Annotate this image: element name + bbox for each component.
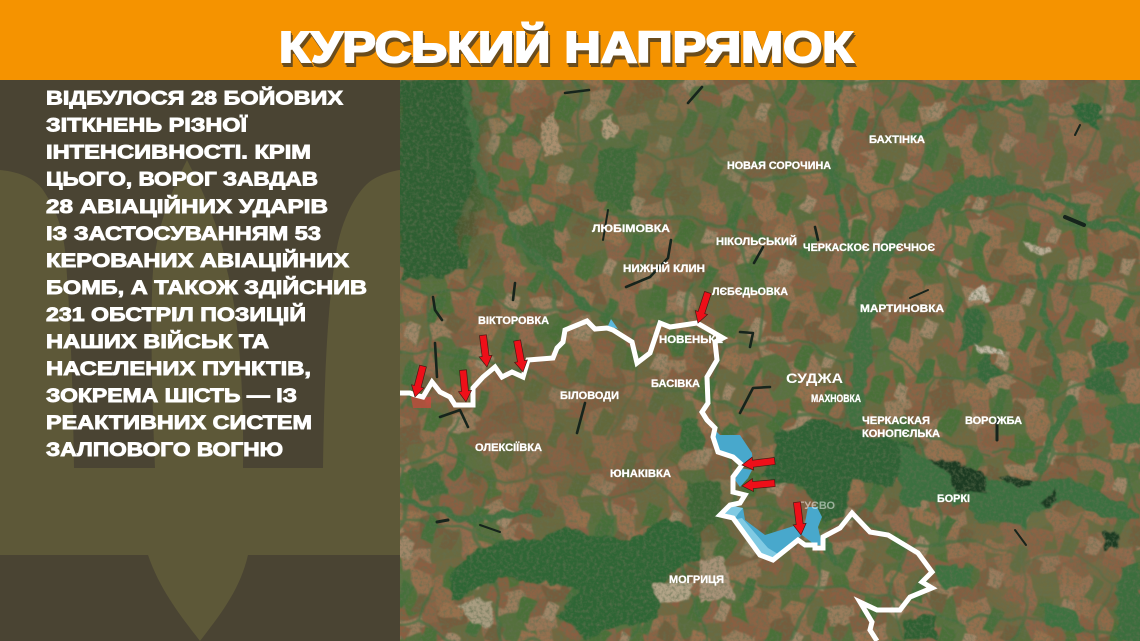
western greens xyxy=(400,80,478,280)
satellite fields background xyxy=(380,60,1140,641)
text block: summary: ЗІТКНЕНЬ РІЗНОЇ xyxy=(46,114,248,136)
arrow 2 xyxy=(457,370,472,403)
text block: summary: КЕРОВАНИХ АВІАЦІЙНИХ xyxy=(46,248,349,272)
pale bare fields xyxy=(1020,240,1055,255)
trident emblem watermark xyxy=(0,160,400,641)
settlement labels: ЛЄБЄДЬОВКА xyxy=(712,286,788,298)
title shadow: КУРСЬКИЙ НАПРЯМОК xyxy=(280,23,854,74)
settlement labels: МОГРИЦЯ xyxy=(669,574,724,586)
south-west forest xyxy=(450,517,700,637)
blue contested areas xyxy=(607,319,822,560)
settlement labels: ЧЕРКАСКАЯ xyxy=(862,415,930,427)
green patches east xyxy=(1107,405,1140,443)
occupied zone red marker xyxy=(411,397,431,408)
image grain xyxy=(400,80,1140,641)
settlement labels: МАРТИНОВКА xyxy=(860,303,944,315)
text block: summary: НАСЕЛЕНИХ ПУНКТІВ, xyxy=(46,358,311,380)
text block: summary: ЦЬОГО, ВОРОГ ЗАВДАВ xyxy=(46,169,318,191)
settlement labels: НОВЕНЬКЕ xyxy=(659,334,723,346)
text block: summary: ІНТЕНСИВНОСТІ. КРІМ xyxy=(46,142,311,164)
arrow 3 xyxy=(478,334,492,368)
settlement labels: ОЛЕКСІЇВКА xyxy=(475,441,542,454)
arrow 5 xyxy=(694,291,712,324)
forests and green corridors xyxy=(400,80,1140,641)
settlement labels: ВІКТОРОВКА xyxy=(478,315,549,327)
dark woodland patches xyxy=(927,460,987,493)
settlement labels: БОРКІ xyxy=(937,493,970,505)
settlement labels: КОНОПЄЛЬКА xyxy=(862,428,940,440)
settlement labels: НОВАЯ СОРОЧИНА xyxy=(727,160,831,172)
arrow 6 xyxy=(741,456,776,470)
title xyxy=(279,21,855,76)
settlement labels: НИЖНІЙ КЛИН xyxy=(623,262,705,275)
arrow 1 xyxy=(411,364,427,398)
settlement labels: ЧЕРКАСКОЄ ПОРЄЧНОЄ xyxy=(803,242,935,254)
faded label under arrow: ГУЄВО xyxy=(798,500,835,512)
arrow 7 xyxy=(742,478,776,492)
text block: summary: 28 АВІАЦІЙНИХ УДАРІВ xyxy=(46,194,328,218)
text block: summary: ЗОКРЕМА ШІСТЬ — ІЗ xyxy=(46,385,297,407)
settlement labels: СУДЖА xyxy=(786,370,843,386)
central forest xyxy=(757,420,920,527)
settlement labels: БАСІВКА xyxy=(651,378,700,390)
text block: summary: БОМБ, А ТАКОЖ ЗДІЙСНИВ xyxy=(46,275,367,299)
text block: summary: 231 ОБСТРІЛ ПОЗИЦІЙ xyxy=(46,302,306,326)
frontline border xyxy=(400,321,932,641)
settlement labels: МАХНОВКА xyxy=(811,393,861,405)
settlement labels xyxy=(475,134,1022,586)
green corridors xyxy=(400,80,1140,560)
header bar xyxy=(0,0,1140,80)
panel: map xyxy=(380,60,1140,641)
settlement labels: ЛЮБІМОВКА xyxy=(592,223,670,235)
text block: summary: ІЗ ЗАСТОСУВАННЯМ 53 xyxy=(46,223,321,245)
attack arrows xyxy=(409,291,807,536)
text block: summary: РЕАКТИВНИХ СИСТЕМ xyxy=(46,412,312,434)
settlement labels: БАХТІНКА xyxy=(869,134,925,146)
settlement labels: НІКОЛЬСЬКИЙ xyxy=(716,235,797,248)
settlement labels: ЮНАКІВКА xyxy=(610,468,671,480)
rivers xyxy=(433,87,1084,545)
arrow 4 xyxy=(513,340,528,373)
title text: КУРСЬКИЙ НАПРЯМОК xyxy=(279,21,853,72)
left panel background xyxy=(0,80,400,641)
text block: summary: ВІДБУЛОСЯ 28 БОЙОВИХ xyxy=(46,86,343,110)
settlement labels: БІЛОВОДИ xyxy=(560,390,619,402)
title shadow: КУРСЬКИЙ НАПРЯМОК xyxy=(281,25,855,76)
text block: summary: ЗАЛПОВОГО ВОГНЮ xyxy=(46,439,283,461)
text block: summary xyxy=(46,86,367,461)
eastern forest band xyxy=(900,443,1140,527)
text block: summary: НАШИХ ВІЙСЬК ТА xyxy=(46,329,269,353)
regional colour zones xyxy=(380,75,1140,620)
settlement labels: ВОРОЖБА xyxy=(965,415,1022,427)
arrow 8 xyxy=(792,501,807,536)
